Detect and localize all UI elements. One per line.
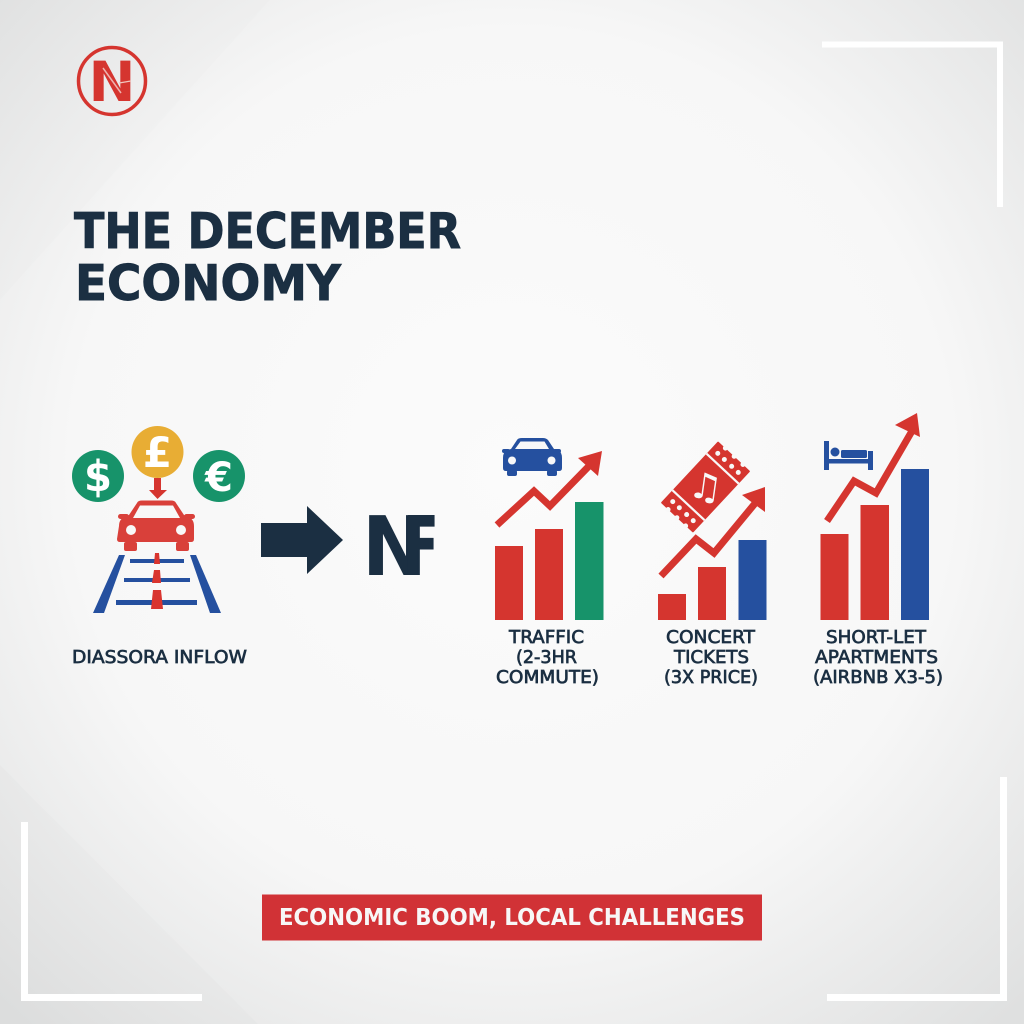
arrow: money into car: [149, 478, 167, 499]
corner frame: top right: [822, 44, 1000, 207]
label: short-let apartments: SHORT-LET: [826, 628, 926, 648]
title: [74, 203, 461, 312]
label: concert tickets: (3X PRICE): [664, 668, 758, 688]
label: short-let apartments: [813, 628, 943, 688]
panel: diaspora inflow: [72, 426, 247, 668]
bar chart: [495, 502, 604, 620]
icon: dollar coin: $: [84, 452, 112, 502]
label: short-let apartments: (AIRBNB X3-5): [813, 668, 943, 688]
icon: road: [93, 553, 221, 613]
icon: euro coin: [193, 450, 245, 502]
label: traffic: TRAFFIC: [508, 628, 584, 648]
panel: concert tickets: [657, 437, 766, 688]
logo: N in red circle: N: [88, 50, 136, 114]
label: diaspora inflow: DIASSORA INFLOW: [72, 648, 247, 668]
label: concert tickets: CONCERT: [666, 628, 755, 648]
trend arrow: [661, 487, 765, 576]
bar chart: [658, 540, 766, 620]
icon: bed: [824, 441, 873, 470]
logo: N in red circle: [78, 48, 146, 114]
trend arrow: [497, 451, 602, 525]
corner frame: bottom right: [827, 777, 1004, 998]
icon: pound coin: [132, 426, 184, 478]
NF mark: N: [362, 500, 427, 595]
icon: euro coin: €: [204, 455, 233, 501]
panel: traffic: [495, 438, 604, 688]
arrow: inflow to NF: [261, 506, 343, 574]
icon: pound coin: £: [143, 428, 172, 477]
label: traffic: [496, 628, 599, 688]
trend arrow: [827, 413, 920, 521]
banner: economic boom, local challenges: ECONOMIC BOOM, LOCAL CHALLENGES: [279, 905, 745, 931]
title: THE DECEMBER: [74, 203, 461, 260]
title: ECONOMY: [75, 255, 341, 312]
icon: red car: [117, 500, 195, 551]
bar chart: [820, 469, 929, 620]
icon: dollar coin: [72, 450, 124, 502]
panel: short-let apartments: [813, 413, 943, 688]
label: short-let apartments: APARTMENTS: [815, 648, 938, 668]
banner: economic boom, local challenges: [262, 894, 762, 940]
label: traffic: COMMUTE): [496, 668, 599, 688]
label: concert tickets: [664, 628, 758, 688]
corner frame: bottom left: [24, 822, 202, 998]
NF mark: F: [403, 500, 439, 595]
label: concert tickets: TICKETS: [673, 648, 749, 668]
icon: blue car: [502, 438, 562, 476]
icon: ticket: [657, 437, 755, 537]
label: traffic: (2-3HR: [516, 648, 577, 668]
icon: ticket: ♫: [686, 465, 725, 510]
